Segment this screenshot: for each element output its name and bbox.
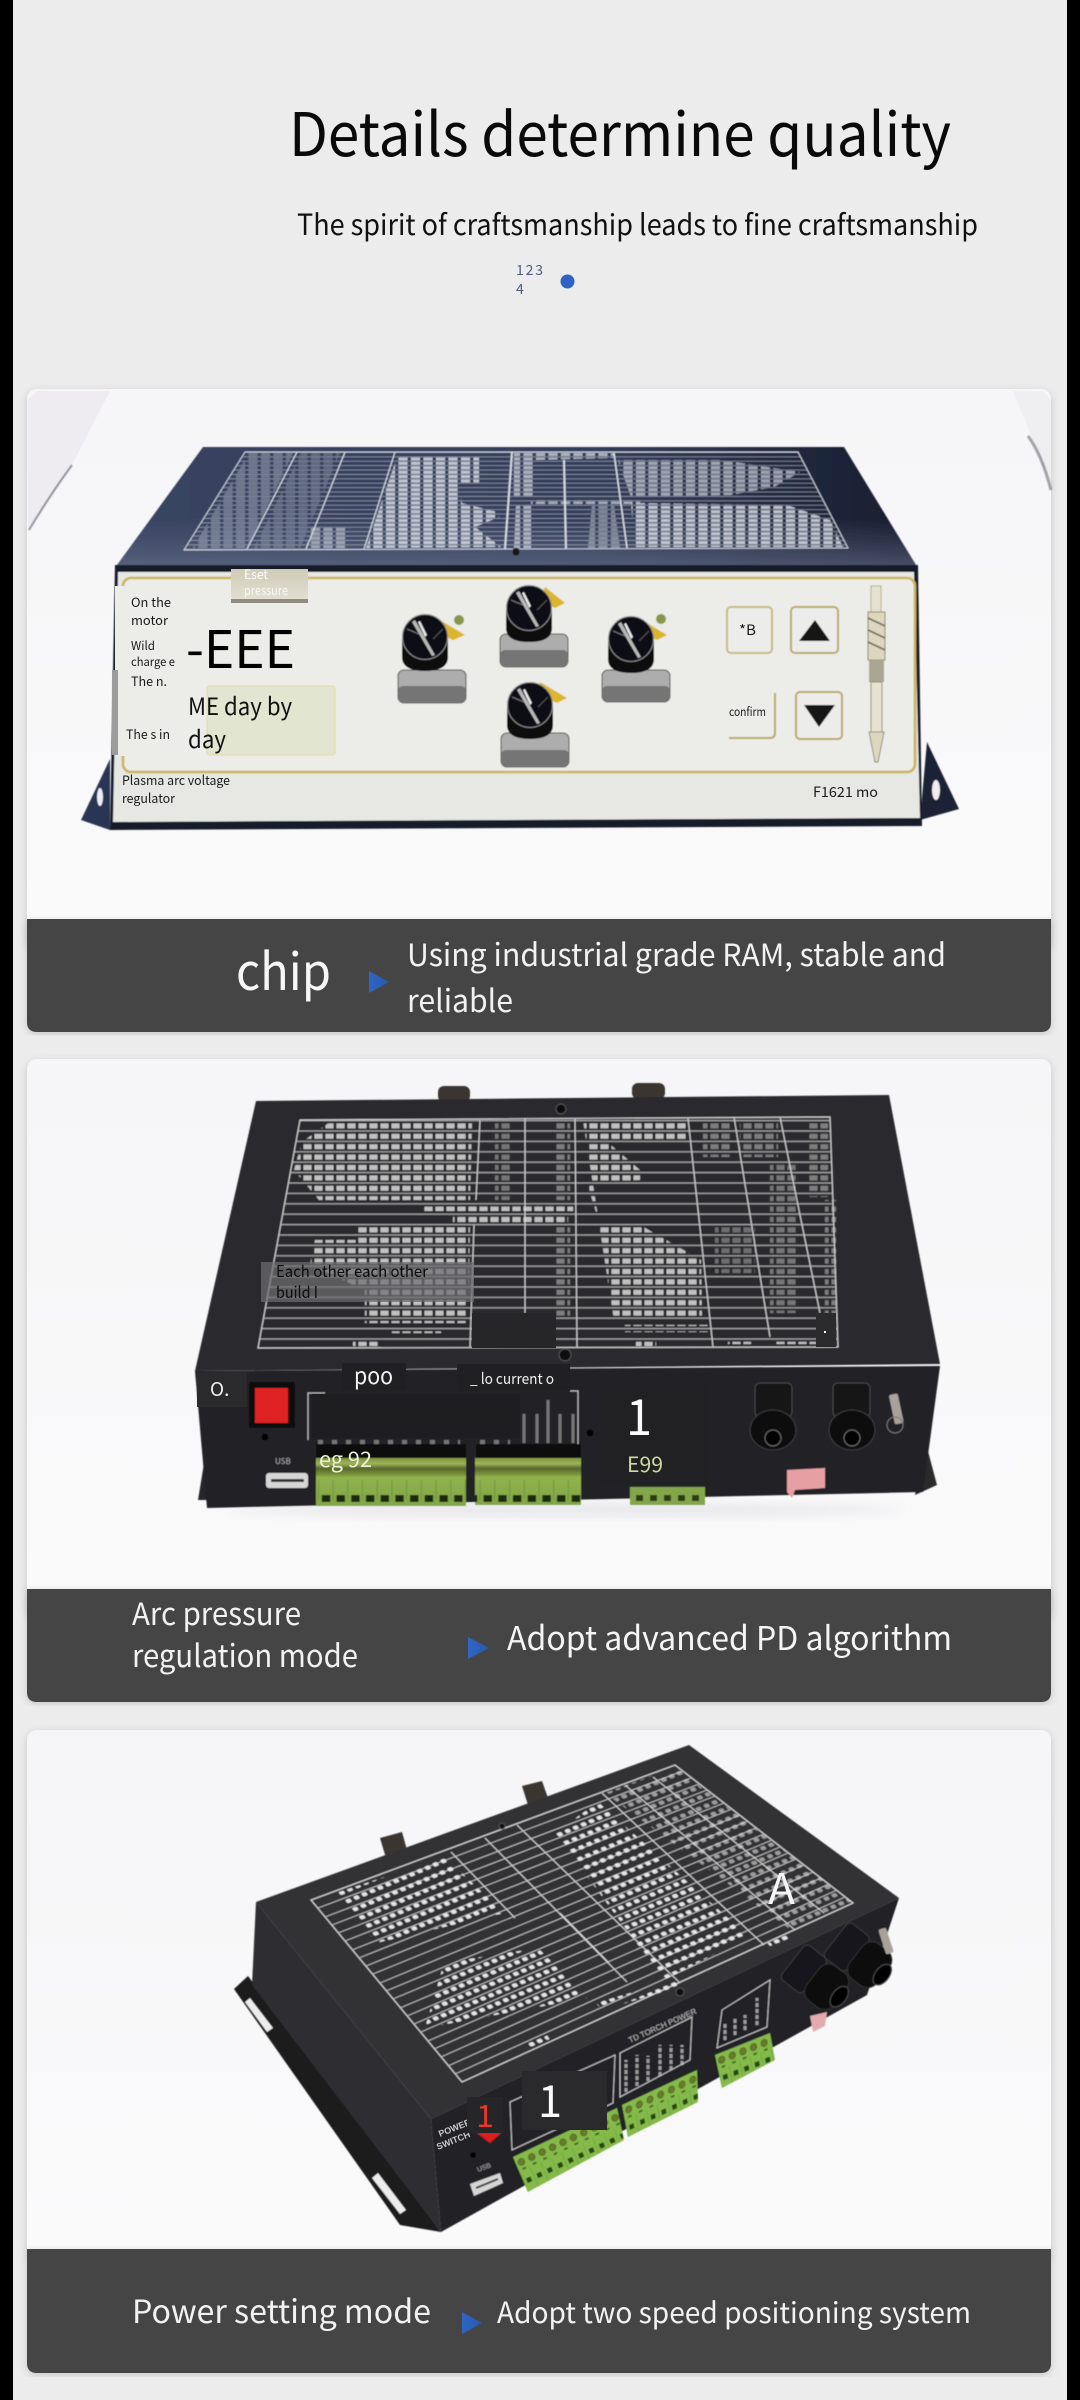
green display patch [207,686,335,755]
control unit front view [81,447,959,830]
USB port [266,1456,308,1488]
small numerals: 123 [516,260,543,280]
display labels: Wild [131,637,155,654]
top screws [499,1823,684,1996]
red switch tip [477,2131,503,2143]
display labels: charge e [131,653,175,670]
large numeral 1: 1 [626,1378,652,1450]
display labels: *B [739,620,756,640]
small table patch [816,1313,836,1347]
red numeral patch [467,2091,503,2136]
pressure label [244,564,288,599]
caption bar: power setting [27,2249,1051,2373]
display labels: On the [131,592,171,611]
torch illustration [868,586,885,762]
label current [457,1364,570,1391]
pink label [787,1468,825,1498]
front face [431,1898,899,2232]
terminal mask [312,1394,520,1438]
front panel body [110,565,922,830]
dark table patch [472,1313,556,1348]
terminal label E99: E99 [627,1449,663,1479]
cable gland left [750,1383,796,1450]
caption heading: Power setting mode [132,2287,431,2333]
power switch legend: SWITCH [435,2129,472,2152]
switch hole [262,1434,268,1440]
display labels: The s in [126,724,170,743]
yellow panel outline [123,578,915,772]
knob 4 with label plate [501,682,569,767]
display labels: confirm [729,703,766,720]
pink label [810,2012,827,2032]
caption description [407,930,946,1021]
button: up [791,607,838,653]
segment display text: -EEE [186,608,295,683]
ground bolt [887,1393,904,1433]
terminal block 2 [622,2070,698,2137]
top face [117,447,916,565]
label current: _ lo current o [470,1368,554,1389]
label O: O. [210,1375,229,1402]
control unit rear view [195,1083,940,1514]
display labels: Plasma arc voltage [122,770,230,789]
USB port: USB [275,1456,291,1467]
power switch legend: POWER [437,2117,473,2139]
left mounting bracket [81,759,110,830]
caption heading: chip [236,931,331,1005]
overlay note [276,1258,429,1303]
right black edge strip [1067,0,1080,2400]
device floor shadow [225,1506,905,1514]
terminal frames [510,1980,770,2150]
terminal pin legends [626,1998,757,2092]
small numerals: 4 [516,279,524,299]
panel: chip [27,389,1051,1032]
parameter table [258,1117,838,1348]
top face [256,1745,899,2119]
right mounting bracket [920,742,959,820]
panel: power setting [27,1730,1051,2373]
ground bolt [878,1927,894,1955]
red numeral patch: 1 [476,2091,494,2136]
power switch legend [435,2117,473,2152]
caption description: Adopt two speed positioning system [497,2290,971,2332]
button: B [727,607,772,653]
switch hole [470,2152,476,2158]
caption heading: Arc pressure [132,1589,301,1634]
right chassis hole [586,1430,594,1436]
card 2 image background [27,1059,1051,1619]
right bracket [915,1440,937,1495]
caption description: Using industrial grade RAM, stable and [407,930,946,975]
top face [195,1095,940,1371]
rear knobs [380,1781,548,1858]
display labels: F1621 mo [813,782,878,802]
USB port [470,2162,503,2196]
overlay note: Each other each other [276,1258,429,1282]
parameter table [311,1765,853,2082]
white patch behind left labels [112,586,191,756]
mode text [188,687,292,755]
left bracket [198,1445,225,1500]
grey text patch [261,1262,474,1302]
knob 3 with label plate [602,614,670,702]
display labels: regulator [122,788,176,807]
terminal frame lines and tiny labels [308,1391,578,1445]
dark numeral patch [522,2071,607,2130]
arrow [462,2312,482,2334]
top screw [512,548,520,556]
button: confirm [729,693,775,738]
letter A: A [768,1856,795,1917]
label O [197,1372,247,1407]
display labels [122,592,878,807]
arrow [369,971,389,993]
panel: arc pressure regulation [27,1059,1051,1702]
top parameter table [184,452,848,550]
caption bar: arc pressure [27,1589,1051,1702]
card 1 image background [27,389,1051,949]
title: Details determine quality [289,87,951,174]
torch power legend: TD TORCH POWER [627,2007,698,2045]
card 3 image background [27,1730,1051,2260]
USB port: USB [476,2162,493,2174]
terminal block 1 [513,2108,624,2192]
pressure patch [231,569,308,603]
pressure label: Eset [244,564,268,583]
left black edge strip [0,0,13,2400]
numeral mask [600,1385,710,1485]
display labels: motor [131,610,169,629]
power switch [249,1382,295,1428]
cable gland right [829,1383,875,1450]
cable gland left [779,1943,858,2018]
caption heading [132,1589,358,1676]
subtitle: The spirit of craftsmanship leads to fine craftsmanship [297,202,978,244]
left side [252,1902,441,2232]
cable gland right [822,1921,901,1996]
rear knobs [438,1083,665,1102]
button: down [796,692,842,739]
display labels: The n. [131,671,167,690]
large numeral 1: 1 [538,2066,562,2130]
small numerals [516,260,543,299]
top screws [556,1104,571,1361]
mode text: day [188,720,226,755]
caption bar: chip [27,919,1051,1032]
terminal blocks [316,1444,705,1506]
label poo [342,1357,406,1391]
caption heading: regulation mode [132,1631,358,1676]
label poo: poo [354,1357,393,1391]
knob 1 with label plate [398,614,466,703]
arrow [468,1637,489,1659]
left bracket [234,1976,441,2232]
overlay note: build I [276,1279,318,1303]
blue dot [560,274,574,288]
caption description: reliable [407,976,513,1021]
control unit angled view [234,1745,901,2232]
mode text: ME day by [188,687,292,722]
front face [195,1366,940,1508]
knob 2 with label plate [500,586,568,667]
pressure label: pressure [244,580,288,599]
terminal block 3 [715,2033,775,2088]
terminal label eg 92: eg 92 [319,1444,372,1474]
caption description: Adopt advanced PD algorithm [507,1612,952,1660]
